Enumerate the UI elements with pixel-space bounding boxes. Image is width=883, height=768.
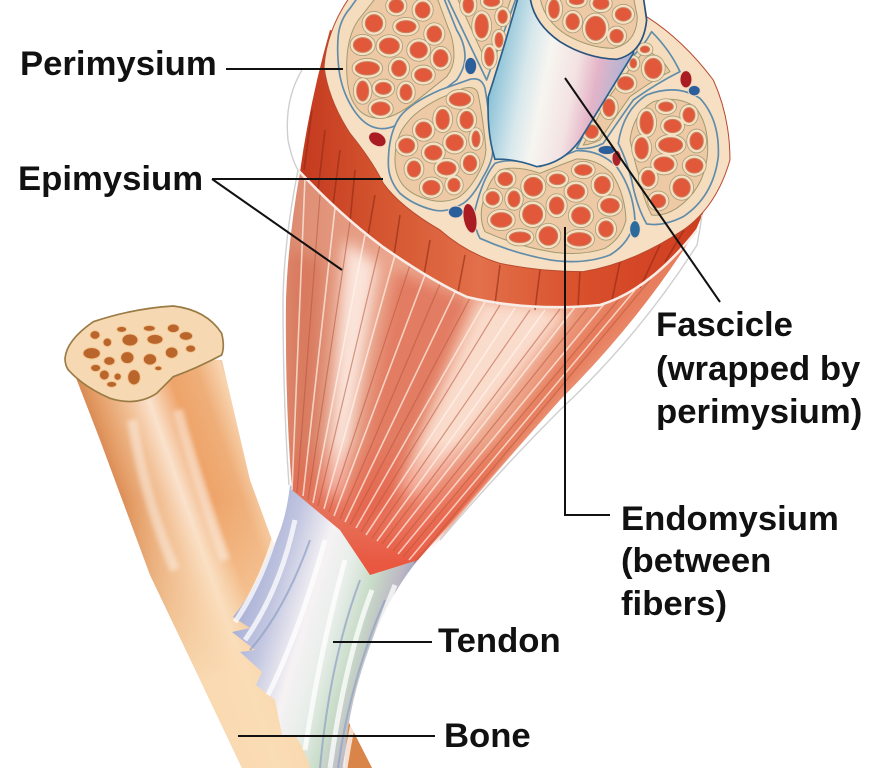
label: Perimysium: Perimysium (20, 45, 217, 83)
illustration: bone (65, 306, 372, 768)
label: Fascicle (565, 78, 862, 431)
blood vessels (366, 57, 700, 238)
label: Endomysium: Endomysium (621, 500, 839, 538)
fascicle interiors (347, 0, 708, 254)
label: Fascicle: (wrapped by (656, 350, 861, 388)
label: Tendon: Tendon (438, 622, 561, 660)
bone cut face (65, 306, 223, 402)
label: Fascicle: Fascicle (656, 306, 793, 344)
label: Endomysium: fibers) (621, 585, 727, 623)
label: Endomysium (565, 227, 839, 623)
protruding fascicle end (530, 0, 647, 59)
label: Epimysium (18, 160, 383, 270)
illustration: muscle cross section with fascicles (324, 0, 730, 272)
label: Bone: Bone (444, 717, 531, 755)
label: Endomysium: (between (621, 542, 771, 580)
epimysium cut surface (324, 0, 730, 272)
fascicle shells (338, 0, 718, 262)
muscle fibers in cross section (353, 0, 703, 246)
illustration: muscle body wrapped by epimysium (283, 30, 730, 575)
illustration: tendon (232, 485, 418, 768)
label: Epimysium: Epimysium (18, 160, 203, 198)
label: Fascicle: perimysium) (656, 393, 862, 431)
epimysium edge (298, 170, 697, 307)
red muscle band (300, 30, 730, 307)
protruding fascicle (488, 0, 643, 167)
